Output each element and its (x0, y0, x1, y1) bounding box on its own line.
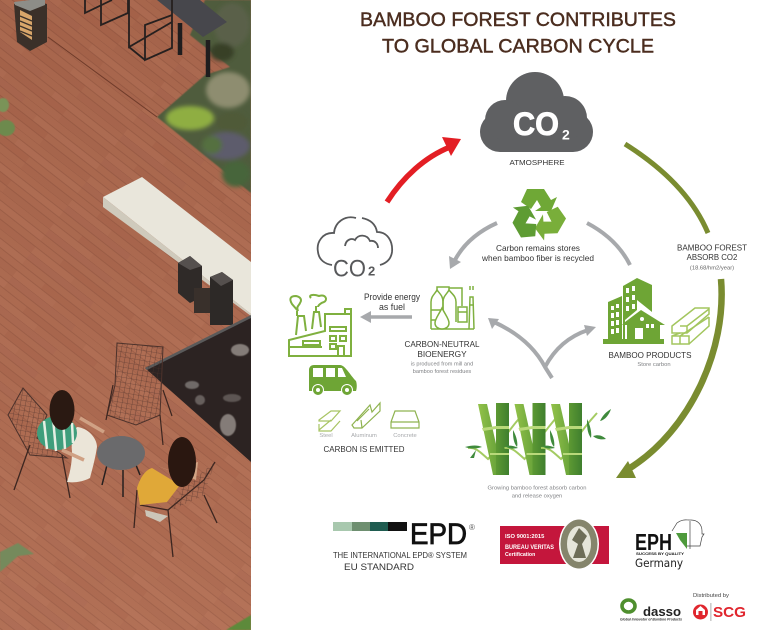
bamboo caption: Growing bamboo forest absorb carbon (488, 486, 586, 492)
icon: bioenergy plant (431, 286, 474, 329)
icon: steel (319, 411, 340, 431)
icon: outline CO2 cloud: CO (333, 256, 366, 282)
logo: dasso: Global Innovator of Bamboo Products (620, 618, 682, 622)
icon: aluminum (352, 403, 380, 428)
bioenergy text (404, 339, 480, 375)
arrow: olive absorb arc (625, 144, 708, 233)
logo: Bureau Veritas: BUREAU VERITAS (505, 544, 554, 551)
icon: stacked bamboo planks (672, 308, 709, 344)
logo: EPD (333, 518, 475, 573)
title (360, 9, 676, 58)
title: BAMBOO FOREST CONTRIBUTES (360, 9, 676, 31)
seam on deck (48, 37, 157, 117)
left edge foliage (0, 98, 251, 630)
woman in yellow skirt on chair (134, 437, 217, 557)
recycle caption: Carbon remains stores (496, 243, 580, 253)
logo: SCG distributed by: SCG (713, 604, 746, 621)
logo: SCG distributed by (693, 593, 746, 621)
photo: bamboo deck terrace (0, 0, 251, 630)
logo: Bureau Veritas: ISO 9001:2015 (505, 534, 545, 540)
atmosphere label: ATMOSPHERE (510, 158, 564, 167)
logo: Bureau Veritas: Certification (505, 552, 535, 558)
title: TO GLOBAL CARBON CYCLE (382, 36, 654, 58)
bamboo products label: Store carbon (637, 362, 671, 368)
icon: factory (289, 295, 351, 356)
energy caption: as fuel (379, 302, 405, 312)
recycle caption: when bamboo fiber is recycled (481, 253, 594, 263)
absorb label: (18.68/hm2/year) (690, 266, 734, 272)
bioenergy text: bamboo forest residues (413, 369, 471, 375)
bar table and stools (85, 0, 227, 77)
logo: EPH Germany (635, 519, 704, 570)
bioenergy text: CARBON-NEUTRAL (404, 339, 480, 349)
white bench (103, 177, 251, 316)
bamboo caption: and release oxygen (512, 494, 562, 500)
material labels: Steel (319, 433, 333, 439)
icon: concrete (391, 411, 419, 428)
absorb label: BAMBOO FOREST (677, 244, 747, 252)
carbon emitted label: CARBON IS EMITTED (324, 444, 404, 454)
icon: outline CO2 cloud: 2 (368, 264, 375, 278)
round side table (97, 436, 145, 497)
logo: EPD: EPD (410, 518, 467, 551)
icon: CO2 atmosphere cloud (480, 72, 593, 152)
icon: green van (309, 365, 357, 396)
material labels: Aluminum (351, 433, 377, 439)
material labels: Concrete (393, 433, 417, 439)
logo: dasso: dasso (643, 604, 681, 619)
bamboo products label (608, 350, 692, 368)
logo: SCG distributed by: Distributed by (693, 593, 729, 599)
logo: EPH Germany: SUCCESS BY QUALITY (636, 552, 685, 556)
icon: recycle symbol (506, 189, 569, 244)
planting bed (157, 0, 251, 193)
logo: EPD: EU STANDARD (344, 562, 414, 573)
wire chair top (106, 343, 172, 445)
woman in green striped shirt (37, 390, 104, 482)
recycle caption (481, 243, 594, 263)
arrow: grey forked arrow from bamboo (488, 318, 596, 378)
absorb label (677, 244, 747, 272)
bioenergy text: is produced from mill and (411, 362, 473, 368)
arrow: grey energy arrow (360, 311, 412, 323)
energy caption (364, 292, 421, 312)
icon: CO2 atmosphere cloud: CO (513, 106, 559, 142)
icon: CO2 atmosphere cloud: 2 (562, 126, 570, 142)
bioenergy text: BIOENERGY (417, 349, 467, 359)
icon: outline CO2 cloud (318, 217, 392, 282)
bamboo caption (488, 486, 586, 500)
logo: EPH Germany: Germany (635, 556, 683, 570)
logo: EPH Germany: EPH (635, 529, 672, 555)
absorb label: ABSORB CO2 (687, 253, 737, 262)
energy caption: Provide energy (364, 292, 421, 302)
logo: Bureau Veritas (500, 518, 609, 570)
bamboo products label: BAMBOO PRODUCTS (608, 350, 692, 360)
arrow: grey recycle to bioenergy (449, 223, 497, 269)
wire chair left (8, 388, 70, 498)
arrow: grey products to recycle (587, 223, 630, 265)
logo: EPD: THE INTERNATIONAL EPD® SYSTEM (333, 551, 467, 560)
lantern (14, 0, 47, 51)
arrow: red emission arrow (387, 137, 461, 202)
logo: EPD: ® (469, 523, 475, 532)
icon: bamboo forest (465, 403, 611, 475)
dark pond (145, 315, 251, 462)
icon: buildings (603, 278, 665, 344)
material labels (319, 433, 417, 439)
arrow: olive arrow to bamboo (616, 279, 722, 478)
dark boxes (178, 256, 233, 325)
logo: dasso (620, 600, 682, 622)
